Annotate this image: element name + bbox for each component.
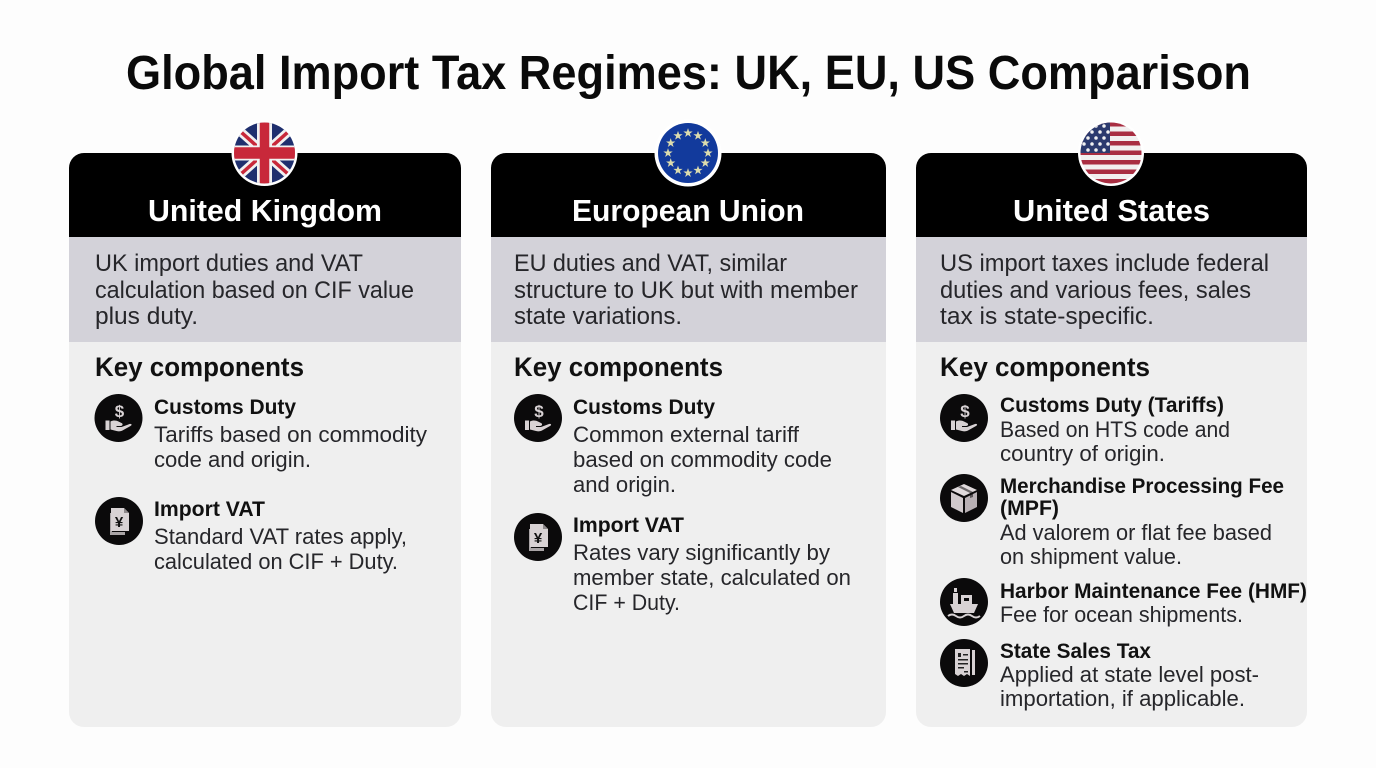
- subheading: key components: Key components: [95, 352, 304, 382]
- summary text: European Union: state variations.: [514, 303, 682, 330]
- item: customs duty: Common external tariff: [573, 422, 800, 447]
- header bar: United Kingdom: [69, 153, 461, 237]
- icon: hand with dollar: [514, 394, 562, 442]
- subheading: key components: Key components: [514, 352, 723, 382]
- icon: receipt: [940, 639, 988, 687]
- item: state sales tax: [1000, 639, 1259, 711]
- summary text: European Union: [514, 250, 858, 330]
- item: import VAT: Import VAT: [154, 497, 265, 521]
- item: customs duty: code and origin.: [154, 447, 311, 472]
- icon: cargo ship: [940, 578, 988, 626]
- icon: yen document: [95, 497, 143, 545]
- item: harbor maintenance fee: [1000, 579, 1307, 627]
- item: harbor maintenance fee: Harbor Maintenance Fee (HMF): [1000, 579, 1307, 603]
- item: import VAT: Rates vary significantly by: [573, 540, 830, 565]
- item: customs duty (tariffs): Customs Duty (Tariffs): [1000, 393, 1224, 417]
- summary band: United States: [916, 237, 1307, 342]
- item: state sales tax: importation, if applicable.: [1000, 686, 1245, 711]
- item: merchandise processing fee: on shipment value.: [1000, 544, 1182, 569]
- subheading: key components: Key components: [940, 352, 1150, 382]
- panel: United Kingdom: [69, 118, 461, 727]
- summary text: United States: duties and various fees, sales: [940, 277, 1251, 304]
- summary text: United States: [940, 250, 1269, 330]
- item: customs duty (tariffs): Based on HTS code and: [1000, 417, 1230, 442]
- heading: United States: United States: [1013, 193, 1210, 228]
- item: import VAT: Standard VAT rates apply,: [154, 524, 407, 549]
- panel: United States: [916, 120, 1307, 727]
- header bar: United States: [916, 153, 1307, 237]
- item: merchandise processing fee: [1000, 474, 1284, 569]
- title: Global Import Tax Regimes: UK, EU, US Comparison: [126, 47, 1251, 100]
- icon: hand with dollar: [94, 394, 142, 442]
- item: import VAT: member state, calculated on: [573, 565, 851, 590]
- summary band: United Kingdom: [69, 237, 461, 342]
- item: customs duty: based on commodity code: [573, 447, 832, 472]
- icon: package box: [940, 474, 988, 522]
- heading: United Kingdom: United Kingdom: [148, 193, 382, 228]
- summary text: United Kingdom: plus duty.: [95, 303, 198, 330]
- item: customs duty: [573, 395, 832, 497]
- item: import VAT: [154, 497, 407, 574]
- summary text: European Union: EU duties and VAT, similar: [514, 250, 787, 277]
- icon: US flag: [1078, 120, 1144, 186]
- item: import VAT: CIF + Duty.: [573, 590, 680, 615]
- item: merchandise processing fee: Merchandise Processing Fee: [1000, 474, 1284, 498]
- summary text: European Union: structure to UK but with member: [514, 277, 858, 304]
- summary text: United Kingdom: UK import duties and VAT: [95, 250, 363, 277]
- header bar: European Union: [491, 153, 886, 237]
- item: customs duty: Customs Duty: [154, 395, 296, 419]
- item: state sales tax: Applied at state level post-: [1000, 662, 1259, 687]
- item: import VAT: [573, 513, 851, 615]
- summary text: United States: tax is state-specific.: [940, 303, 1154, 330]
- heading: European Union: European Union: [572, 193, 804, 228]
- item: customs duty: and origin.: [573, 472, 676, 497]
- item: customs duty (tariffs): country of origin.: [1000, 441, 1165, 466]
- summary text: United Kingdom: calculation based on CIF value: [95, 277, 414, 304]
- summary text: United States: US import taxes include federal: [940, 250, 1269, 277]
- panel: European Union: [491, 120, 886, 727]
- item: import VAT: Import VAT: [573, 513, 684, 537]
- icon: hand with dollar: [940, 394, 988, 442]
- item: customs duty: Customs Duty: [573, 395, 715, 419]
- item: customs duty: [154, 395, 427, 472]
- item: state sales tax: State Sales Tax: [1000, 639, 1151, 663]
- item: customs duty: Tariffs based on commodity: [154, 422, 427, 447]
- item: merchandise processing fee: (MPF): [1000, 496, 1059, 520]
- icon: yen document: [514, 513, 562, 561]
- icon: EU flag: [654, 120, 722, 186]
- item: customs duty (tariffs): [1000, 393, 1230, 466]
- summary band: European Union: [491, 237, 886, 342]
- item: harbor maintenance fee: Fee for ocean shipments.: [1000, 602, 1243, 627]
- summary text: United Kingdom: [95, 250, 414, 330]
- item: merchandise processing fee: Ad valorem or flat fee based: [1000, 520, 1272, 545]
- icon: UK flag: [232, 122, 298, 186]
- item: import VAT: calculated on CIF + Duty.: [154, 549, 398, 574]
